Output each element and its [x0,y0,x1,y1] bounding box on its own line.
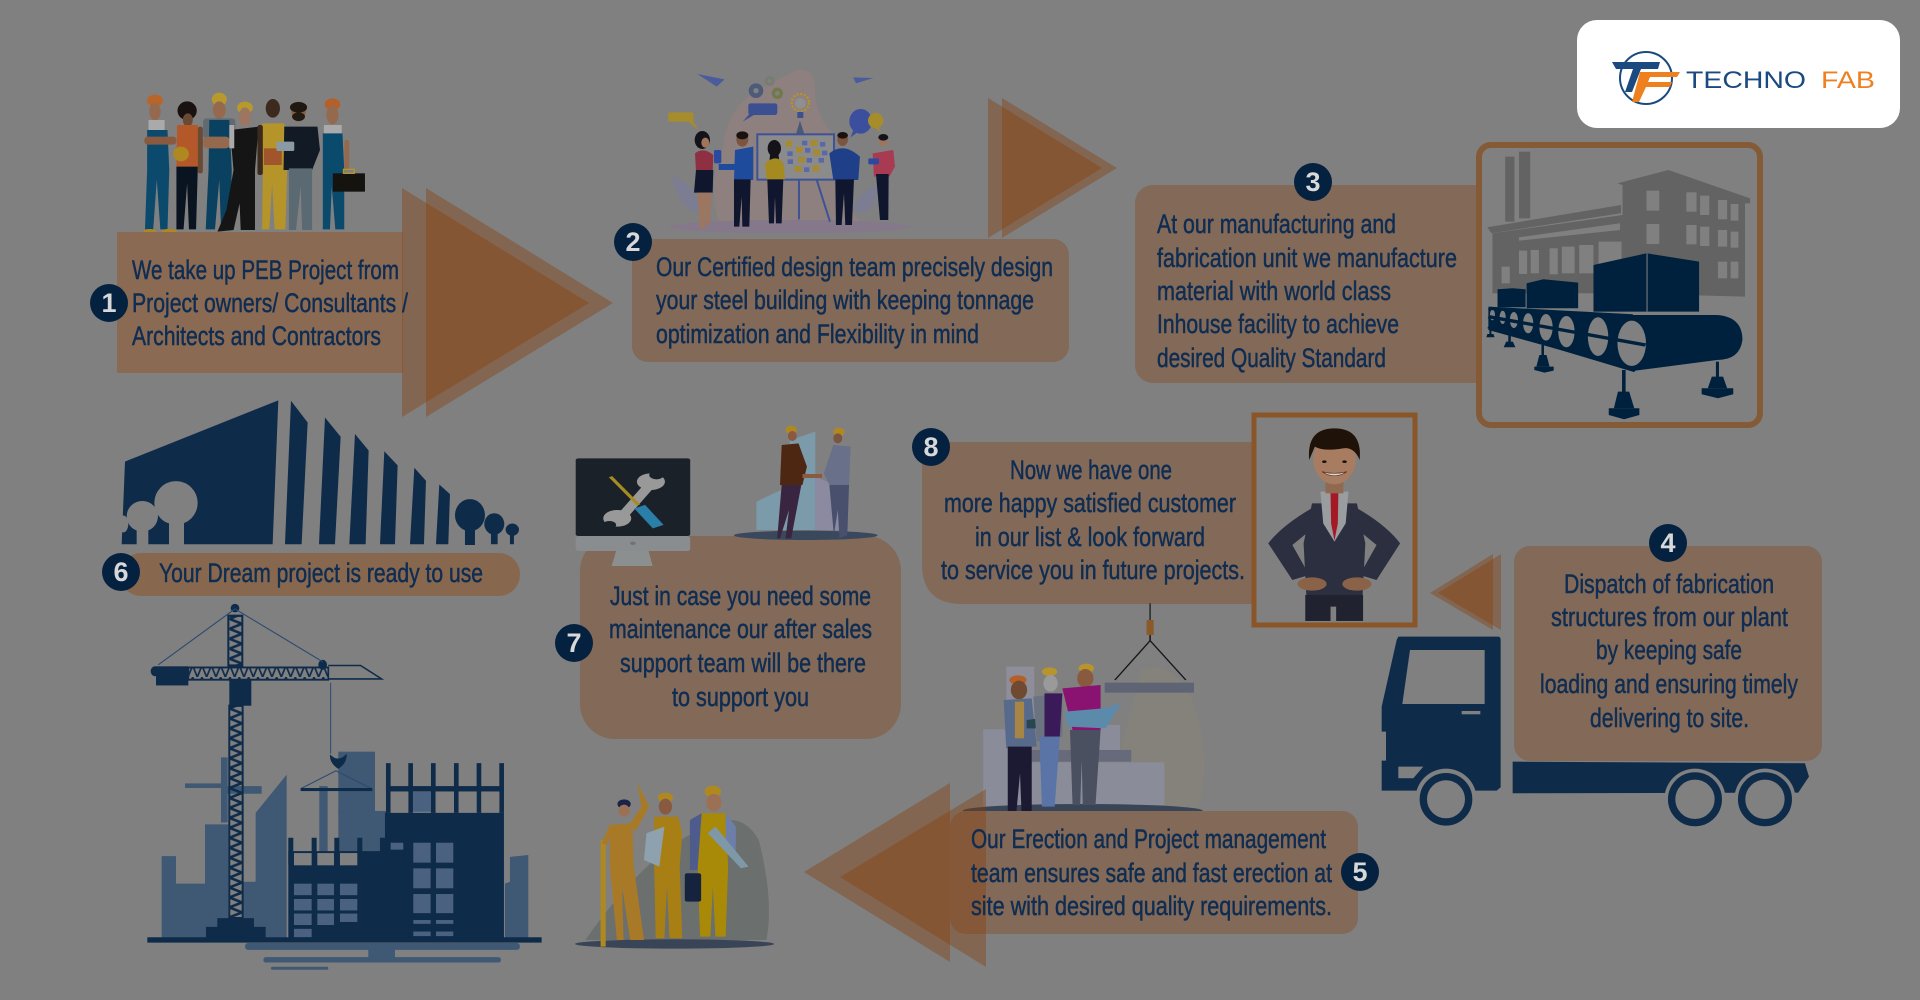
step 5 text: team ensures safe and fast erection at [971,858,1332,888]
step 5 site workers illustration [575,783,774,949]
step 5 badge [1341,853,1379,891]
step 3 badge: 3 [1305,167,1321,197]
step 1 text: Architects and Contractors [132,321,381,351]
step 3 text: At our manufacturing and [1157,209,1396,239]
step 8 badge: 8 [923,432,939,462]
step 8 text [941,455,1245,585]
step 7 panel [555,536,901,739]
step 2 badge [614,223,652,261]
step 6 panel [102,553,520,596]
step 2 text: Our Certified design team precisely design [656,252,1053,282]
step 6 badge [102,553,140,591]
arrow from step 4 to step 8 [1430,554,1501,630]
step 3 text: material with world class [1157,276,1391,306]
step 4 text: structures from our plant [1551,602,1788,632]
step 3 text: fabrication unit we manufacture [1157,243,1457,273]
step 8 text: to service you in future projects. [941,555,1245,585]
step 1 badge: 1 [101,288,117,318]
step 8 badge [912,428,950,466]
step 1 arrow [402,188,613,417]
step 8 text: Now we have one [1010,455,1172,485]
step 1 badge [90,284,128,322]
step 6 finished building illustration [118,400,519,545]
factory and conveyor [1486,152,1750,419]
step 3 badge [1294,163,1332,201]
step 7 text [609,581,872,712]
step 2 team illustration [668,70,911,233]
truck illustration [1382,637,1809,830]
handshake illustration [734,426,878,540]
logo card [1577,20,1900,128]
step 1 text: Project owners/ Consultants / [132,288,408,318]
step 6 badge: 6 [113,557,129,587]
factory frame and illustration [1479,145,1760,425]
step 2 text: your steel building with keeping tonnage [656,285,1034,315]
step 7 badge [555,624,593,662]
step 5 text [971,824,1332,921]
logo mark [1612,52,1680,104]
customer portrait [1268,428,1400,621]
step 5 erection team illustration [963,603,1204,817]
step 8 text: in our list & look forward [975,522,1205,552]
step 8 text: more happy satisfied customer [944,488,1236,518]
step 1 text [132,255,408,351]
step 4 text: by keeping safe [1596,635,1742,665]
step 3 panel [1135,163,1495,383]
step 1 text: We take up PEB Project from [132,255,399,285]
maintenance monitor icon [576,458,690,566]
step 4 text: loading and ensuring timely [1540,669,1798,699]
logo wordmark techno: TECHNO [1686,67,1806,94]
step 1 workers illustration [143,93,365,233]
step 7 text: to support you [672,682,809,712]
step 5 panel [804,783,1379,967]
step 8 panel [912,428,1253,604]
step 2 panel [614,223,1069,362]
step 2 badge: 2 [625,227,641,257]
arrow from step 2 to step 3 [988,98,1117,238]
tower crane and construction site illustration [147,604,542,970]
step 2 text: optimization and Flexibility in mind [656,319,979,349]
step 4 text [1540,569,1798,733]
step 7 text: support team will be there [620,648,866,678]
step 1 panel [90,188,613,417]
step 3 text: Inhouse facility to achieve [1157,309,1399,339]
step 3 text [1157,209,1457,373]
step 4 text: Dispatch of fabrication [1564,569,1774,599]
step 5 arrow [804,783,986,967]
step 5 text: site with desired quality requirements. [971,891,1332,921]
step 7 text: Just in case you need some [610,581,871,611]
step 4 badge: 4 [1660,528,1676,558]
step 6 text: Your Dream project is ready to use [159,558,483,588]
step 4 panel [1514,524,1822,761]
logo wordmark fab: FAB [1821,67,1875,94]
step 7 text: maintenance our after sales [609,614,872,644]
step 4 text: delivering to site. [1590,703,1749,733]
step 5 text: Our Erection and Project management [971,824,1326,854]
step 7 badge: 7 [566,628,582,658]
step 4 badge [1649,524,1687,562]
step 3 text: desired Quality Standard [1157,343,1386,373]
step 2 text [656,252,1053,349]
step 5 badge: 5 [1352,857,1368,887]
happy customer frame and portrait [1254,415,1415,625]
